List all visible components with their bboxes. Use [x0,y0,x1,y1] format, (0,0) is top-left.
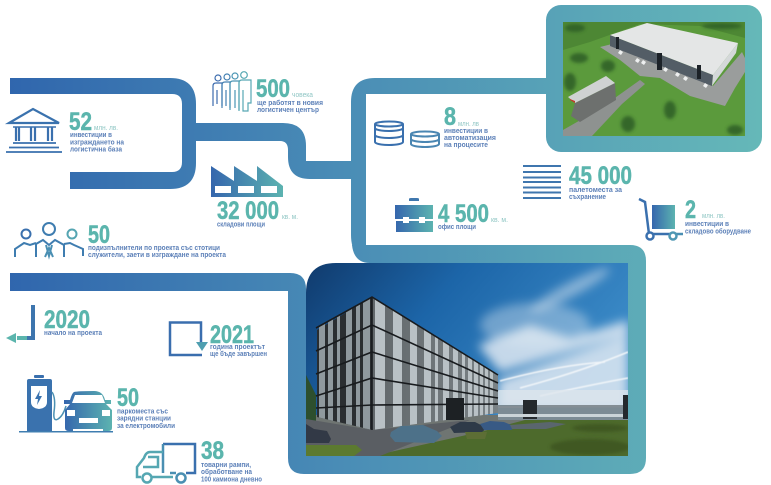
stat: 52 million investment: изграждането на [70,140,124,146]
stat: 50 EV charging spaces: паркоместа със [117,408,168,416]
stat: 8 million automation: на процесите [444,142,488,149]
stat: 32 000 sqm warehouse: складови площи [217,222,265,228]
icon: delivery truck [137,444,195,482]
stat: 45 000 pallet places [523,162,632,201]
stat: 52 million investment: инвестиции в [70,132,113,139]
stat: 50 EV charging spaces [19,375,175,432]
stat: 50 contractors: служители, заети в изграждане на проекта [88,252,226,259]
stat: 500 people: човека [292,92,313,99]
stat: 4 500 sqm offices [395,198,508,232]
stat: 32 000 sqm warehouse [211,166,298,228]
icon: hand cart [639,199,683,240]
stat: 2020 project start: 2020 [44,306,90,334]
stat: 500 people: ще работят в новия [257,99,323,107]
icon: stacked lines [523,165,561,199]
stat: 500 people: 500 [256,75,290,103]
icon: coin stacks [375,122,439,147]
icon: arrow turning left [6,305,35,343]
frame: warehouse photo [546,5,762,152]
stat: 2021 project completion [170,321,267,358]
stat: 45 000 pallet places: съхранение [569,194,606,201]
stat: 2 million warehouse equipment: складово оборудване [685,228,751,236]
stat: 50 EV charging spaces: 50 [117,384,139,412]
stat: 50 contractors: 50 [88,221,110,249]
stat: 52 million investment: млн. лв. [94,125,118,132]
icon: square with down arrow [170,322,208,355]
stat: 32 000 sqm warehouse: кв. м. [282,214,298,221]
stat: 50 contractors [15,221,226,259]
stat: 52 million investment: логистична база [70,146,122,154]
stat: 8 million automation: автоматизация [444,135,496,142]
stat: 2021 project completion: година проектът [210,344,266,351]
stat: 4 500 sqm offices: 4 500 [438,200,489,228]
stat: 2 million warehouse equipment: млн. лв. [702,213,725,220]
stat: 2 million warehouse equipment: инвестиции в [685,221,730,228]
stat: 4 500 sqm offices: кв. м. [491,217,508,224]
stat: 8 million automation: инвестиции в [444,128,489,135]
stat: 45 000 pallet places: 45 000 [569,162,632,190]
stat: 50 EV charging spaces: за електромобили [117,422,175,430]
stat: 2021 project completion: 2021 [210,321,254,349]
stat: 8 million automation: млн. лв [458,121,479,128]
stat: 4 500 sqm offices: офис площи [438,224,476,231]
stat: 50 EV charging spaces: зарядни станции [117,416,171,422]
stat: 38 loading docks: товарни рампи, [201,462,251,469]
photo: office building [306,263,630,456]
stat: 32 000 sqm warehouse: 32 000 [217,197,279,225]
stat: 2021 project completion: ще бъде завършен [210,350,267,358]
ribbon: central box outline [351,78,600,262]
stat: 50 contractors: подизпълнители по проекта със стотици [88,245,220,252]
stat: 52 million investment: 52 [69,108,92,136]
ribbon: connector to the central box [190,123,353,179]
stat: 38 loading docks [137,437,262,484]
stat: 38 loading docks: 38 [201,437,224,465]
photo: aerial view of logistics park [563,22,745,136]
icon: group of people [213,72,251,111]
icon: factory [211,166,283,197]
icon: electric charging station and car [19,375,113,432]
stat: 38 loading docks: обработване на [201,468,252,476]
stat: 38 loading docks: 100 камиона дневно [201,476,262,484]
frame: office building photo with left ribbon [10,245,646,474]
icon: business people [15,223,83,257]
stat: 52 million investment [6,108,124,154]
icon: briefcase [395,198,433,232]
icon: bank building [6,109,62,152]
stat: 2 million warehouse equipment: 2 [685,196,696,224]
ribbon: left upper band [10,78,196,189]
stat: 500 people [213,72,323,114]
stat: 45 000 pallet places: палетоместа за [569,187,622,194]
stat: 8 million automation: 8 [444,103,456,131]
stat: 500 people: логистичен център [257,107,319,114]
stat: 2020 project start: начало на проекта [44,330,102,337]
stat: 2020 project start [6,305,102,343]
stat: 8 million automation [375,103,496,149]
stat: 2 million warehouse equipment [639,196,751,240]
